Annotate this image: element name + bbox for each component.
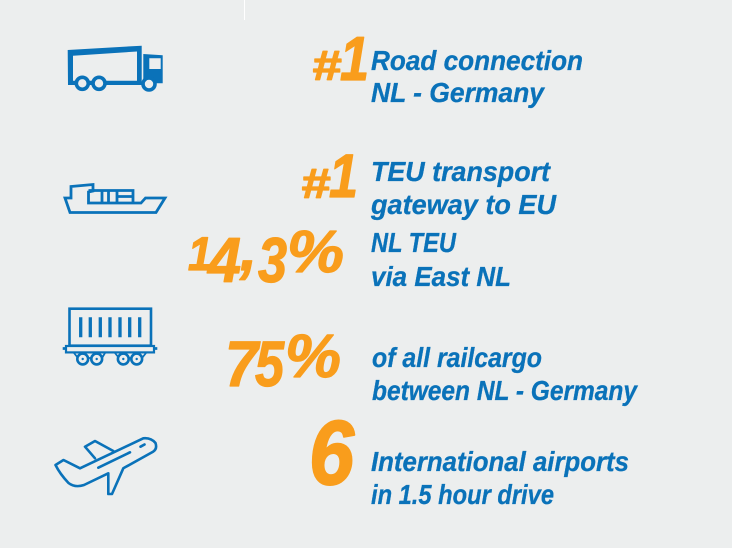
stat: 14,3%: % (287, 219, 344, 285)
stat: 6 airports: 6 (309, 403, 355, 504)
stat: 75% (225, 322, 341, 400)
text: road connection: NL - Germany (371, 77, 545, 108)
text: TEU gateway (370, 156, 557, 220)
stat: 75%: 7 (225, 328, 261, 400)
icon: ship (65, 184, 165, 212)
text: railcargo (372, 342, 638, 406)
text: railcargo: between NL - Germany (372, 375, 638, 406)
text: road connection (371, 45, 583, 108)
stat: 14,3%: 1 (188, 227, 212, 280)
stat: 75%: % (285, 322, 341, 390)
text: international airports: International airports (371, 446, 629, 477)
stat: road number (312, 25, 369, 94)
icon: rail container wagon (63, 309, 157, 364)
text: NL TEU via East NL (371, 227, 511, 292)
stat: road number: 1 (340, 25, 369, 94)
stat: TEU number (301, 142, 358, 210)
stat: 14,3%: , (239, 215, 257, 284)
text: NL TEU via East NL: via East NL (371, 261, 511, 292)
text: international airports (371, 446, 629, 510)
text: international airports: in 1.5 hour drive (371, 479, 554, 510)
stat: road number: # (312, 42, 342, 89)
stat: 75%: 5 (255, 328, 285, 400)
text: TEU gateway: gateway to EU (370, 189, 557, 220)
stat: TEU number: 1 (329, 142, 358, 210)
icon: airplane (56, 438, 156, 494)
stat: 14,3%: 4 (206, 226, 241, 296)
stat: 14,3% (188, 215, 344, 296)
text: railcargo: of all railcargo (372, 342, 542, 373)
stat: TEU number: # (301, 160, 331, 207)
text: road connection: Road connection (371, 45, 583, 76)
stat: 14,3%: 3 (258, 226, 287, 296)
text: TEU gateway: TEU transport (371, 156, 552, 187)
text: NL TEU via East NL: NL TEU (371, 227, 457, 258)
icon: truck (68, 46, 163, 90)
